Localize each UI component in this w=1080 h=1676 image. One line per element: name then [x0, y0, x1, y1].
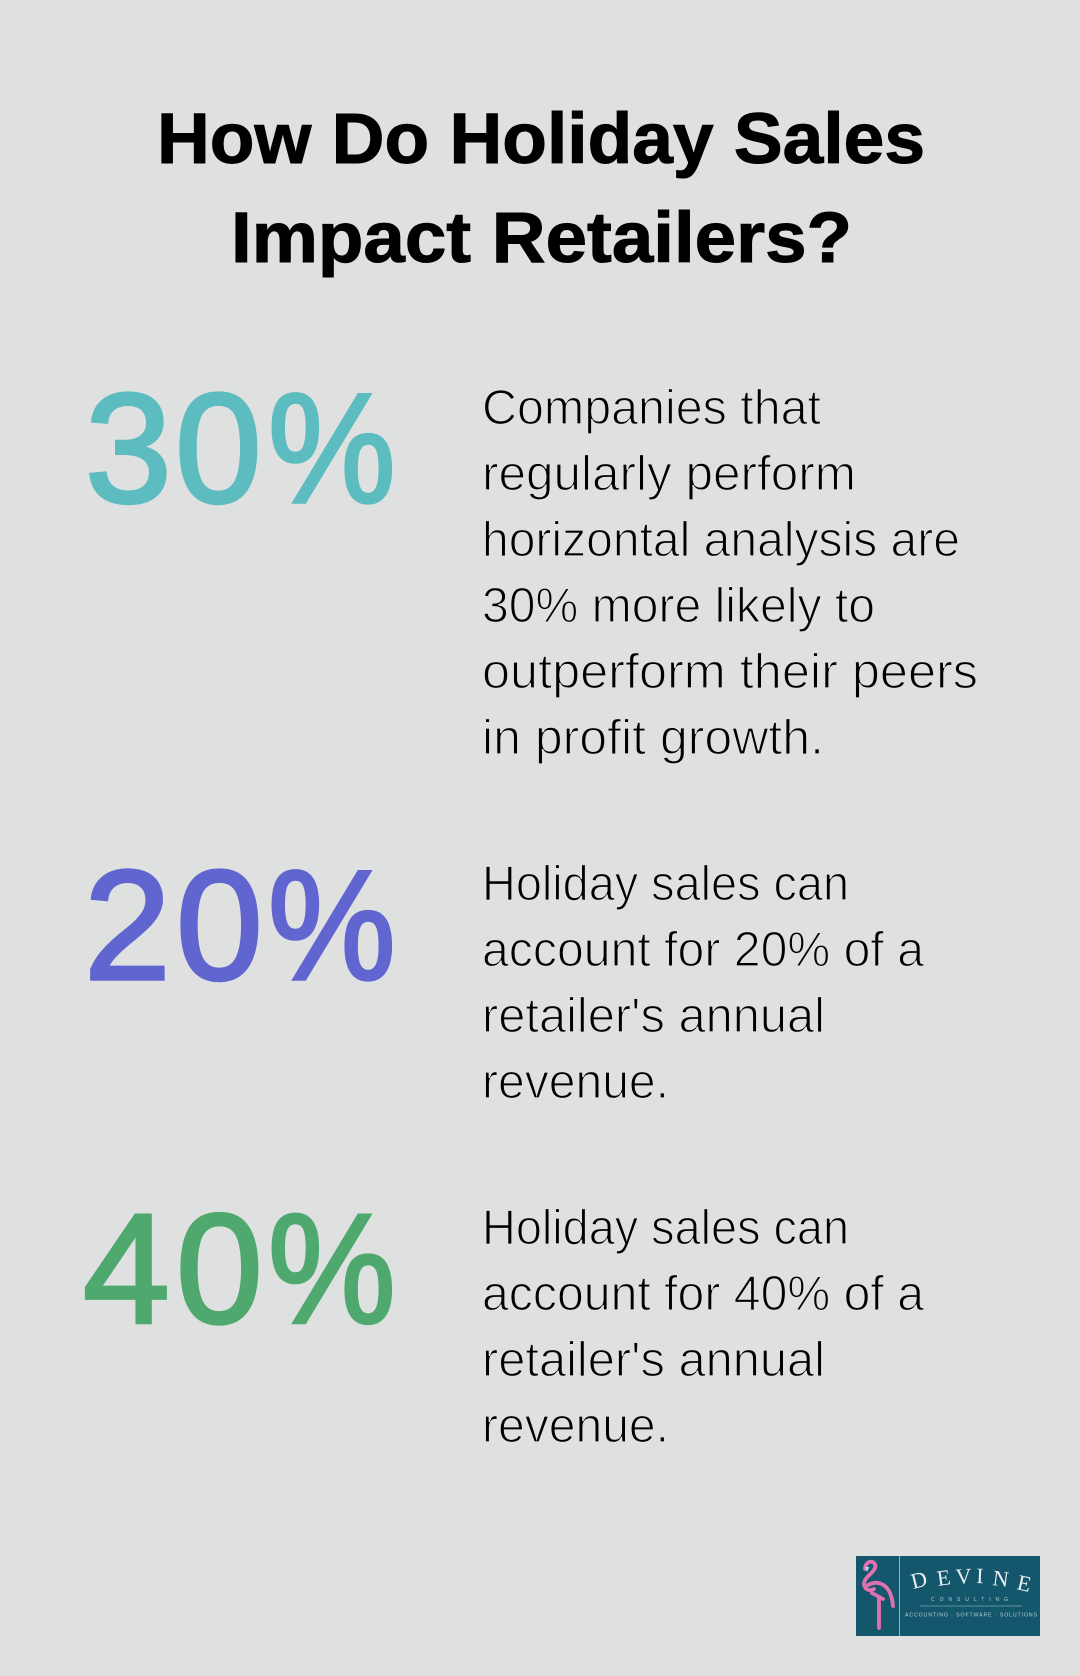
logo subtitle: CONSULTING [931, 1597, 1008, 1603]
description: 30%: Companies that [482, 381, 821, 435]
title: How Do Holiday Sales [157, 100, 925, 179]
description: 30%: outperform their peers [482, 645, 978, 699]
stat: 40% [83, 1181, 396, 1356]
description: 30%: horizontal analysis are [482, 513, 960, 567]
icon: flamingo [864, 1562, 893, 1628]
description: 40%: Holiday sales can [482, 1201, 849, 1255]
stat: 20%: 20 [84, 839, 263, 1013]
title: Impact Retailers? [231, 199, 852, 278]
description: 20%: Holiday sales can [482, 857, 849, 911]
logo tagline: ACCOUNTING · SOFTWARE · SOLUTIONS [905, 1612, 1038, 1618]
description: 30% [482, 381, 978, 765]
logo: Devine Consulting [856, 1556, 1040, 1636]
logo wordmark: DEVINE [908, 1563, 1034, 1597]
stat: 30% [85, 360, 396, 536]
description: 30%: 30% more likely to [482, 579, 875, 633]
description: 20%: retailer's annual [482, 989, 825, 1043]
description: 40% [482, 1201, 925, 1453]
description: 20%: account for 20% of a [482, 923, 925, 977]
stat: 20% [84, 837, 396, 1013]
stat: 20%: % [268, 837, 396, 1012]
description: 40%: retailer's annual [482, 1333, 825, 1387]
stat: 30%: % [268, 360, 396, 535]
description: 30%: in profit growth. [482, 711, 824, 765]
stat: 40%: % [268, 1181, 396, 1356]
title [157, 100, 925, 278]
stat: 40%: 40 [83, 1182, 263, 1356]
stat: 30%: 30 [85, 362, 262, 536]
description: 20%: revenue. [482, 1055, 669, 1109]
description: 30%: regularly perform [482, 447, 856, 501]
description: 40%: revenue. [482, 1399, 669, 1453]
description: 20% [482, 857, 925, 1109]
description: 40%: account for 40% of a [482, 1267, 925, 1321]
